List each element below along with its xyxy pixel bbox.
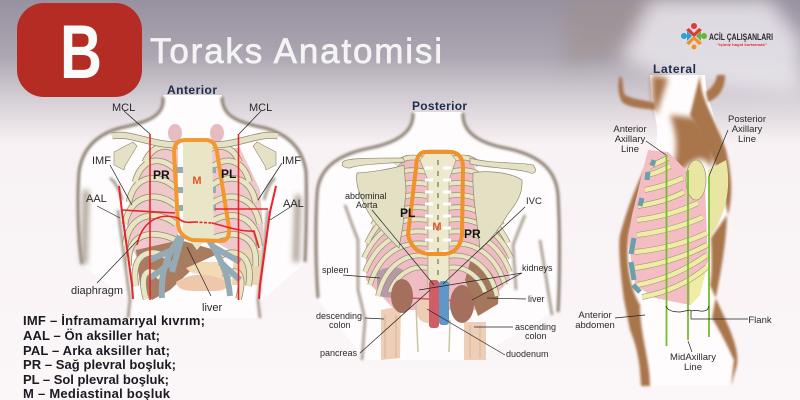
- posterior labels: kidneys: [522, 263, 553, 273]
- lateral labels: Flank: [748, 315, 772, 326]
- costal cartilage: [150, 170, 240, 298]
- lateral labels: Axillary: [732, 124, 763, 135]
- panel: posterior diagram: [316, 99, 560, 360]
- lateral labels: Posterior: [728, 114, 766, 125]
- pleural labels: PL: [221, 167, 236, 181]
- anterior labels: liver: [202, 302, 223, 314]
- posterior labels: [316, 191, 556, 359]
- legend: AAL – Ön aksiller hat;: [23, 328, 160, 343]
- posterior labels: duodenum: [506, 349, 549, 359]
- lateral labels: [575, 114, 772, 373]
- posterior labels: colon: [525, 331, 547, 341]
- flank bracket: [666, 306, 748, 319]
- lateral labels: MidAxillary: [670, 352, 716, 363]
- mediastinum outline and sternum: [174, 140, 229, 250]
- posterior labels: colon: [329, 320, 351, 330]
- mediastinum outline posterior: [408, 152, 463, 254]
- pleural labels: [153, 167, 236, 182]
- posterior labels: descending: [316, 311, 362, 321]
- anterior labels: IMF: [92, 155, 111, 167]
- anterior labels: IMF: [282, 155, 301, 167]
- heading: Lateral: Lateral: [653, 62, 696, 76]
- anterior labels: AAL: [283, 198, 304, 210]
- anterior labels: MCL: [249, 102, 272, 114]
- lateral labels: Line: [738, 134, 756, 145]
- lateral labels: Line: [621, 144, 639, 155]
- anterior labels: AAL: [86, 193, 107, 205]
- lateral labels: Axillary: [615, 134, 646, 145]
- posterior labels: spleen: [322, 265, 349, 275]
- posterior rib cage, spine and scapulae: [342, 150, 535, 316]
- logo: Acil Çalışanları: “işimiz hayat kurtarmak”: [717, 42, 767, 47]
- lateral labels: Line: [684, 362, 702, 373]
- legend: [23, 313, 205, 400]
- heading: Posterior: Posterior: [412, 99, 467, 113]
- title: Toraks Anatomisi: [150, 32, 442, 71]
- anterior labels: MCL: [112, 102, 135, 114]
- posterior labels: ascending: [515, 322, 556, 332]
- posterior body outline: [316, 112, 560, 360]
- badge: letter B: B: [60, 10, 102, 95]
- anterior labels: diaphragm: [71, 285, 123, 297]
- mediastinum outline and sternum: M: [192, 175, 202, 187]
- badge: letter B: [17, 3, 142, 97]
- posterior labels: liver: [528, 294, 545, 304]
- lateral labels: Anterior: [578, 310, 612, 321]
- panel: anterior diagram: [71, 83, 306, 318]
- posterior labels: IVC: [526, 196, 542, 207]
- lateral leader lines: [615, 130, 728, 352]
- posterior organs: [381, 279, 486, 360]
- rib cage: [112, 124, 278, 300]
- pleural labels posterior: PR: [464, 227, 481, 241]
- panel: lateral diagram: [575, 62, 772, 386]
- anterior leader lines: [97, 111, 292, 296]
- pleural labels posterior: [400, 206, 481, 241]
- posterior labels: abdominal: [345, 191, 387, 201]
- lateral ribs: [628, 150, 728, 306]
- logo: Acil Çalışanları: [681, 23, 773, 50]
- legend: PR – Sağ plevral boşluk;: [23, 357, 176, 372]
- legend: PL – Sol plevral boşluk;: [23, 372, 169, 387]
- lateral labels: abdomen: [575, 320, 615, 331]
- red landmark lines: [119, 134, 276, 300]
- lateral body: [618, 75, 737, 386]
- anterior body outline: [78, 95, 306, 318]
- heading: Anterior: Anterior: [167, 83, 217, 97]
- posterior labels: Aorta: [356, 200, 378, 210]
- legend: PAL – Arka aksiller hat;: [23, 343, 170, 358]
- lateral labels: Anterior: [613, 124, 647, 135]
- posterior leader lines: [343, 207, 526, 355]
- anterior labels: [71, 102, 304, 314]
- posterior labels: pancreas: [320, 348, 358, 358]
- logo: Acil Çalışanları: ACİL ÇALIŞANLARI: [709, 32, 773, 42]
- pleural labels posterior: PL: [400, 206, 415, 220]
- pleural labels: PR: [153, 168, 170, 182]
- legend: IMF – İnframamarıyal kıvrım;: [23, 313, 205, 328]
- mediastinum outline posterior: M: [432, 221, 442, 233]
- green axillary lines: [666, 155, 709, 346]
